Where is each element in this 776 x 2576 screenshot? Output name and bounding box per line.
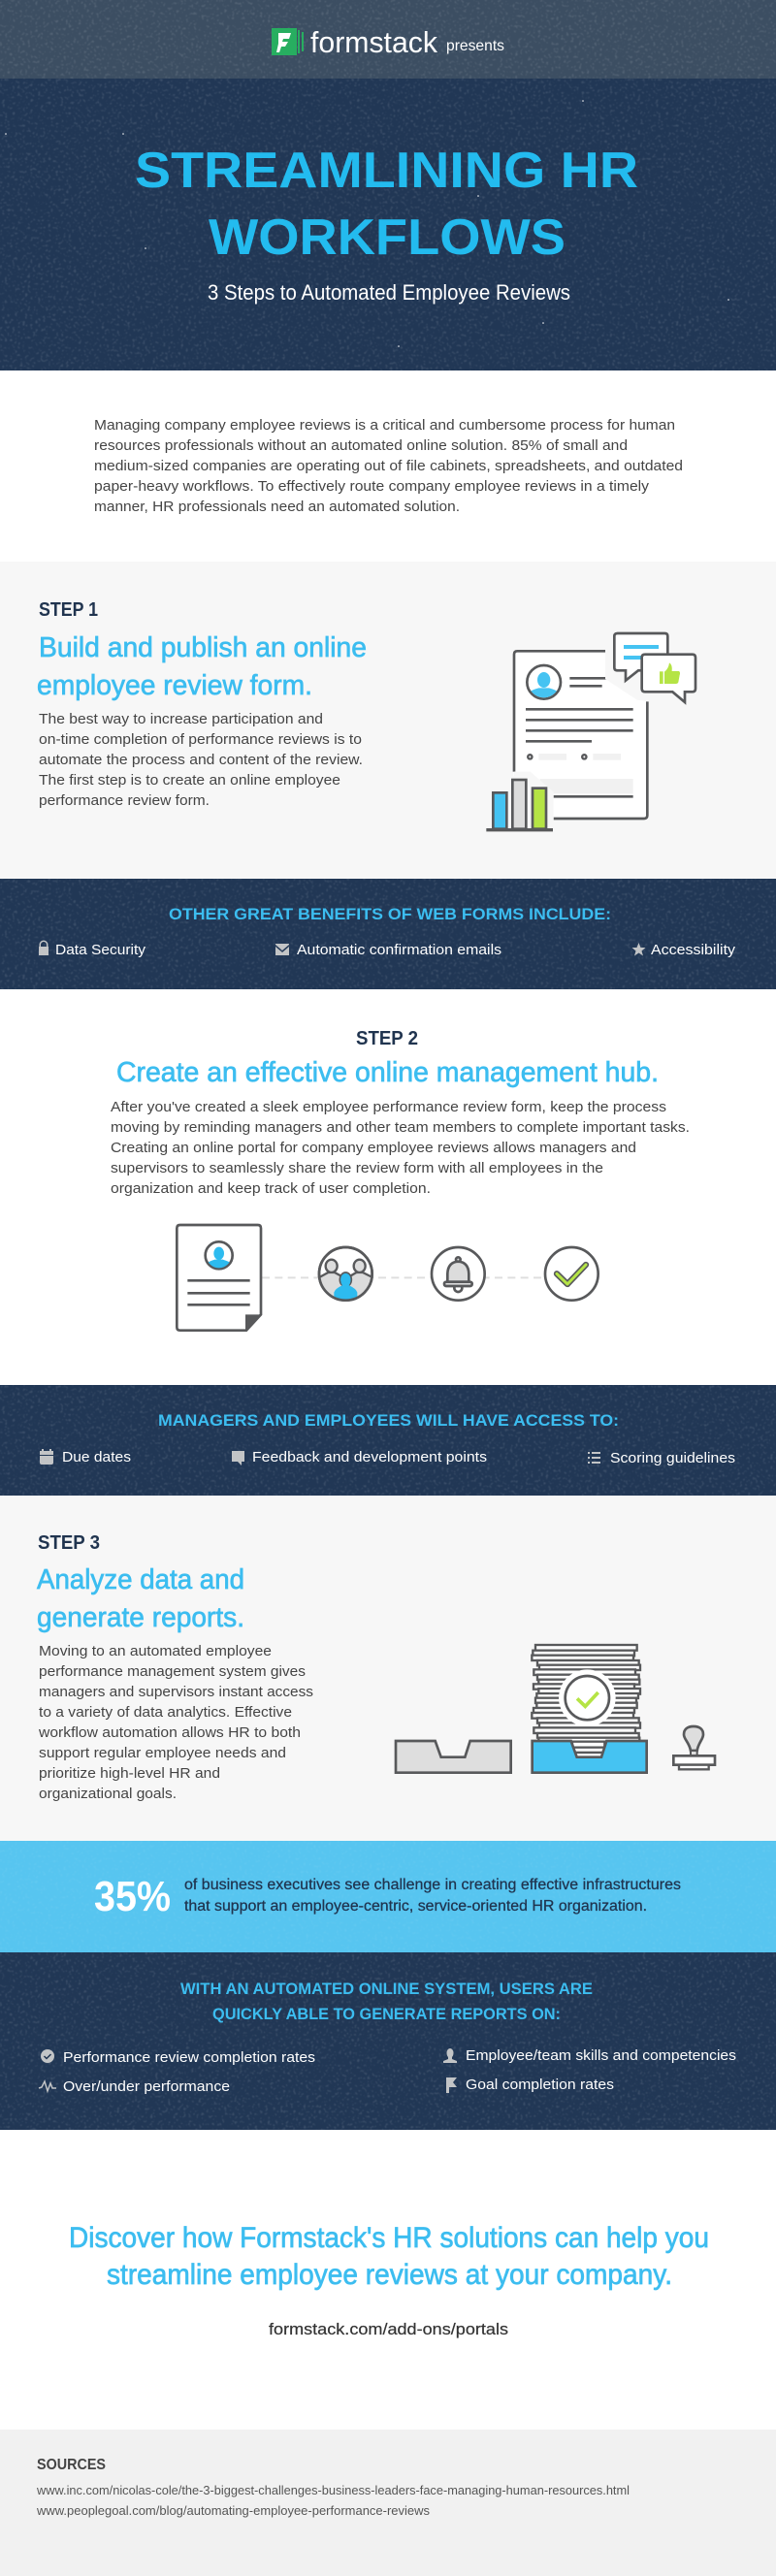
presents label: presents [446,38,504,54]
source links: www.peoplegoal.com/blog/automating-employee-performance-reviews [36,2503,430,2518]
title [135,143,638,266]
step 3 body text: Moving to an automated employee [39,1643,272,1659]
step 3 body text: managers and supervisors instant access [39,1684,313,1700]
illustration: workflow from document to team, reminder and checkmark [177,1225,598,1331]
benefit: accessibility: Accessibility [651,942,736,958]
step 3 body text: organizational goals. [39,1786,177,1802]
panel: header band [0,0,776,79]
icon: speech bubble [232,1451,244,1465]
benefit: data security: Data Security [55,942,146,958]
panel: web form benefits [0,879,776,989]
text block: introduction: medium-sized companies are operating out of file cabinets, spreadsheets, and outdated [94,458,683,474]
step 1 body text: The best way to increase participation and [39,711,323,727]
report item: skills: Employee/team skills and competencies [466,2047,736,2064]
icon: formstack logo [272,28,304,55]
panel: 35% statistic [0,1841,776,1952]
icon: pulse [39,2081,56,2091]
benefits heading: OTHER GREAT BENEFITS OF WEB FORMS INCLUDE: [169,906,611,923]
step 3 body text [38,1643,313,1802]
step 3 body text: performance management system gives [39,1663,306,1680]
text block: introduction: paper-heavy workflows. To effectively route company employee reviews in a timely [94,478,650,495]
reports heading: WITH AN AUTOMATED ONLINE SYSTEM, USERS ARE [180,1980,593,1998]
icon: flag [446,2077,457,2093]
step 2 body text: organization and keep track of user completion. [111,1180,431,1197]
title: WORKFLOWS [209,209,566,266]
statistic description: that support an employee-centric, service-oriented HR organization. [184,1898,647,1915]
step 2 body text [111,1099,690,1197]
access item: due dates: Due dates [62,1449,131,1465]
reports heading: QUICKLY ABLE TO GENERATE REPORTS ON: [212,2006,561,2023]
panel: step 1 [37,602,696,832]
step 3 body text: prioritize high-level HR and [39,1765,220,1782]
step 3 heading: Analyze data and [37,1564,244,1595]
step 1 body text: automate the process and content of the review. [39,752,363,768]
call to action heading: streamline employee reviews at your company. [107,2259,672,2291]
panel: sources [0,2430,776,2576]
panel: manager and employee access [0,1385,776,1496]
statistic description: of business executives see challenge in creating effective infrastructures [184,1877,681,1893]
step 1 label: STEP 1 [39,599,98,621]
step 1 heading: employee review form. [37,670,312,701]
step 3 body text: to a variety of data analytics. Effective [39,1704,292,1721]
step 2 heading: Create an effective online management hub. [116,1057,659,1088]
benefit: confirmation emails: Automatic confirmation emails [297,942,501,958]
text block: introduction: resources professionals without an automated online solution. 85% of small and [94,437,628,454]
report item: goals: Goal completion rates [466,2077,614,2093]
statistic description [184,1877,681,1915]
step 1 body text: on-time completion of performance reviews is to [39,731,362,748]
step 1 body text: performance review form. [39,792,210,809]
step 3 body text: support regular employee needs and [39,1745,286,1761]
call to action [69,2222,709,2338]
report item: completion rates: Performance review completion rates [63,2049,315,2066]
access item: scoring guidelines: Scoring guidelines [610,1450,735,1466]
icon: calendar [40,1449,53,1465]
step 2 body text: Creating an online portal for company employee reviews allows managers and [111,1140,636,1156]
source links [36,2483,630,2518]
step 2 body text: After you've created a sleek employee performance review form, keep the process [111,1099,666,1115]
call to action heading: Discover how Formstack's HR solutions can help you [69,2222,709,2254]
step 3 heading: generate reports. [37,1602,244,1633]
illustration: review form with chat bubbles and bar chart [485,630,698,832]
step 2 body text: moving by reminding managers and other team members to complete important tasks. [111,1119,690,1136]
panel: title banner [0,79,776,370]
step 3 label: STEP 3 [38,1532,100,1554]
step 1 body text [39,711,363,809]
reports heading [180,1980,593,2023]
icon: envelope [275,944,289,955]
panel: step 2 [111,1031,689,1332]
access item: feedback: Feedback and development points [252,1449,487,1465]
step 1 heading: Build and publish an online [39,632,367,663]
report item: over/under performance: Over/under performance [63,2078,230,2095]
sources heading: SOURCES [37,2457,106,2473]
text block: introduction [94,417,683,515]
icon: star [632,943,646,956]
website link: formstack.com/add-ons/portals [269,2321,508,2338]
access heading: MANAGERS AND EMPLOYEES WILL HAVE ACCESS TO: [158,1412,619,1430]
icon: lock [39,941,48,955]
text block: introduction: manner, HR professionals need an automated solution. [94,499,460,515]
step 2 body text: supervisors to seamlessly share the review form with all employees in the [111,1160,603,1176]
icon: check circle [41,2049,54,2063]
panel: step 3 [0,1496,776,1841]
step 3 body text: workflow automation allows HR to both [38,1724,301,1741]
step 1 heading [37,632,367,701]
step 2 label: STEP 2 [356,1028,418,1049]
subtitle: 3 Steps to Automated Employee Reviews [208,280,570,305]
statistic number: 35% [94,1873,171,1920]
panel: report types [0,1952,776,2130]
logo wordmark: formstack [310,25,437,59]
title: STREAMLINING HR [135,143,638,199]
step 3 heading [37,1564,244,1633]
icon: person [443,2048,457,2063]
illustration: trays, document stack and stamp [396,1645,715,1773]
icon: list [588,1452,600,1464]
call to action heading [69,2222,709,2291]
text block: introduction: Managing company employee reviews is a critical and cumbersome process for human [94,417,675,434]
source links: www.inc.com/nicolas-cole/the-3-biggest-challenges-business-leaders-face-managing-human-resources.html [36,2483,630,2497]
step 1 body text: The first step is to create an online employee [39,772,340,789]
